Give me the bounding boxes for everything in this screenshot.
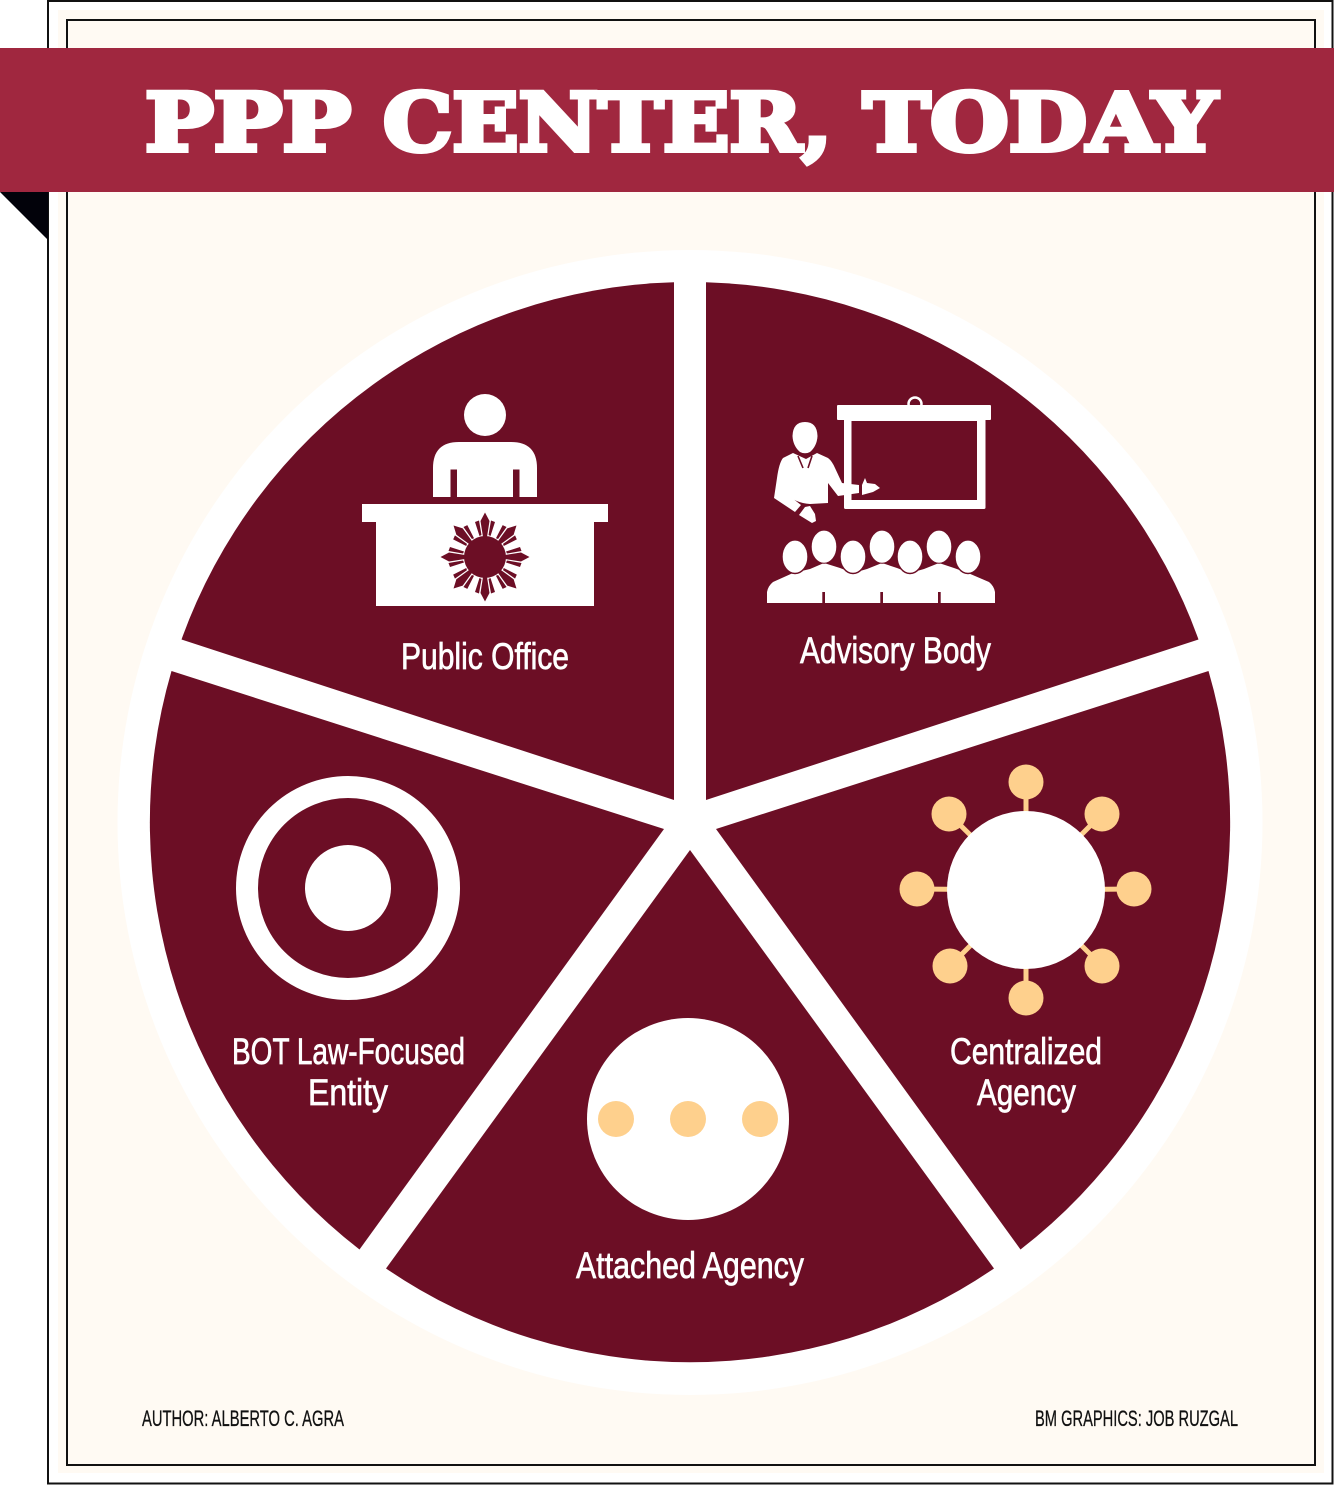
icon: hub with spokes bbox=[900, 764, 1152, 1016]
icon: presenter and audience bbox=[767, 398, 995, 603]
title banner bbox=[0, 48, 1334, 192]
wedge bbox=[182, 282, 674, 800]
panel: centralized agency bbox=[716, 671, 1230, 1250]
presenter bbox=[774, 422, 880, 523]
title: TODAY bbox=[863, 76, 1218, 170]
author credit: AUTHOR: ALBERTO C. AGRA bbox=[142, 1406, 344, 1431]
screen bbox=[837, 398, 991, 509]
title bbox=[145, 76, 1218, 170]
audience bbox=[767, 530, 995, 603]
wedge bbox=[150, 671, 664, 1250]
icon: target ring bbox=[247, 787, 449, 989]
panel: advisory body bbox=[706, 282, 1198, 800]
icon: circle with three dots bbox=[587, 1018, 789, 1220]
label: BOT law-focused entity: Entity bbox=[308, 1072, 388, 1113]
icon: person at desk with sun bbox=[362, 394, 608, 606]
white pie backdrop bbox=[118, 250, 1262, 1395]
label: centralized agency: Centralized bbox=[950, 1031, 1102, 1072]
label: BOT law-focused entity bbox=[232, 1031, 465, 1113]
wedge bbox=[716, 671, 1230, 1250]
panel: attached agency bbox=[386, 850, 994, 1362]
title: PPP bbox=[145, 76, 351, 170]
panel: public office bbox=[182, 282, 674, 800]
graphics credit: BM GRAPHICS: JOB RUZGAL bbox=[1035, 1406, 1238, 1431]
label: centralized agency: Agency bbox=[977, 1072, 1076, 1113]
panel: BOT law-focused entity bbox=[150, 671, 664, 1250]
wedge bbox=[706, 282, 1198, 800]
label: centralized agency bbox=[950, 1031, 1102, 1113]
label: advisory body: Advisory Body bbox=[800, 630, 991, 671]
title: CENTER, bbox=[383, 76, 832, 170]
label: BOT law-focused entity: BOT Law-Focused bbox=[232, 1031, 465, 1072]
label: public office: Public Office bbox=[401, 636, 569, 677]
label: attached agency: Attached Agency bbox=[576, 1245, 804, 1286]
banner fold triangle bbox=[0, 192, 48, 240]
wedge bbox=[386, 850, 994, 1362]
